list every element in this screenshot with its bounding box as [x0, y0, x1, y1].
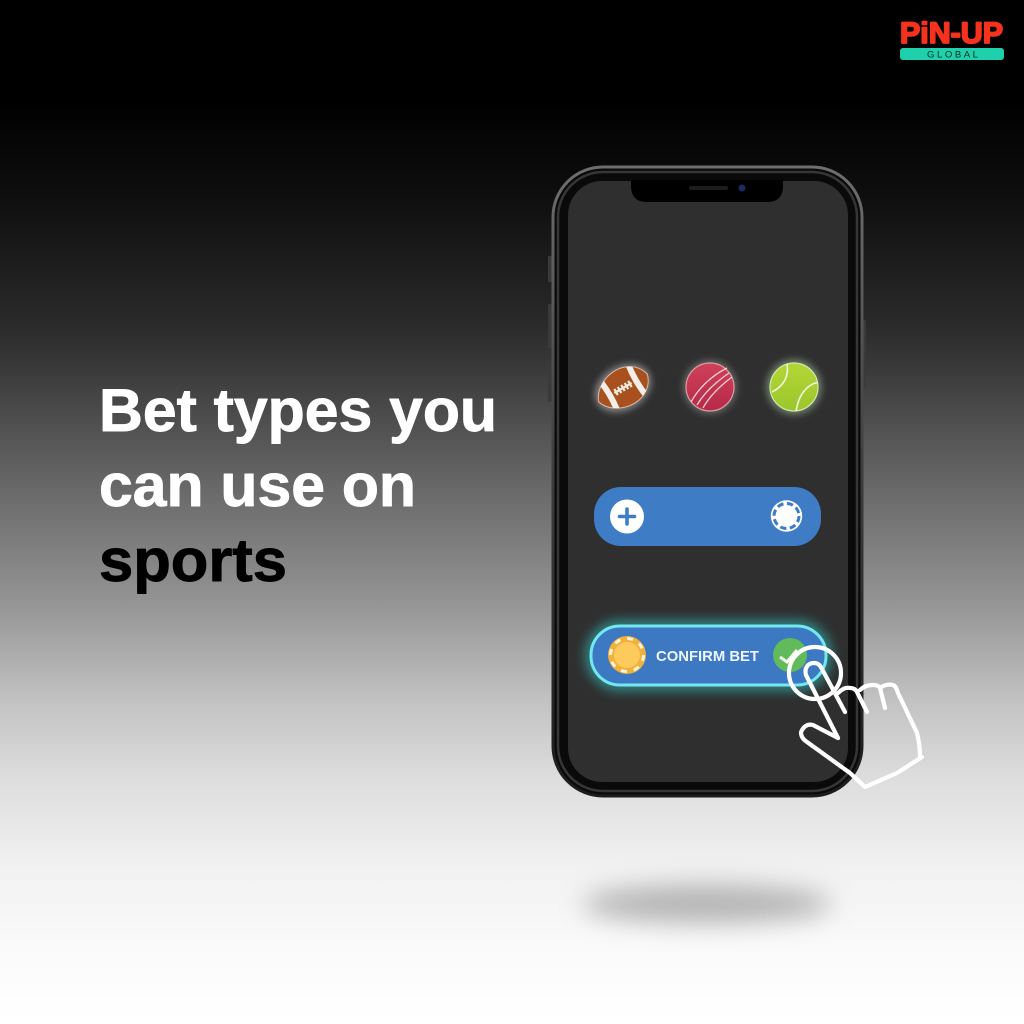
hand outline [805, 663, 845, 738]
screen [568, 181, 848, 782]
icon: check [773, 638, 807, 672]
icon: american football [591, 360, 655, 416]
logo: Pin-Up Global: PiN-UP [900, 17, 1003, 50]
phone [548, 167, 866, 796]
logo: Pin-Up Global: GLOBAL [927, 50, 979, 60]
icon: tapping hand [789, 647, 922, 787]
speaker [689, 186, 728, 190]
title: can use on [99, 452, 416, 519]
notch [631, 180, 783, 202]
side buttons [548, 256, 866, 402]
button: add stake [594, 487, 821, 546]
phone body [553, 167, 862, 796]
title [99, 377, 497, 594]
icon: chip [771, 500, 802, 532]
camera [738, 184, 746, 192]
title: Bet types you [99, 377, 497, 444]
button label: CONFIRM BET [656, 648, 759, 665]
button: confirm bet [591, 626, 826, 685]
icon: tennis ball [766, 359, 822, 415]
tap ring [789, 647, 841, 699]
icon: plus [610, 500, 644, 534]
icon: gold chip [608, 636, 646, 674]
phone shadow [582, 885, 832, 923]
title: sports [99, 527, 287, 594]
icon: cricket ball [683, 360, 737, 414]
